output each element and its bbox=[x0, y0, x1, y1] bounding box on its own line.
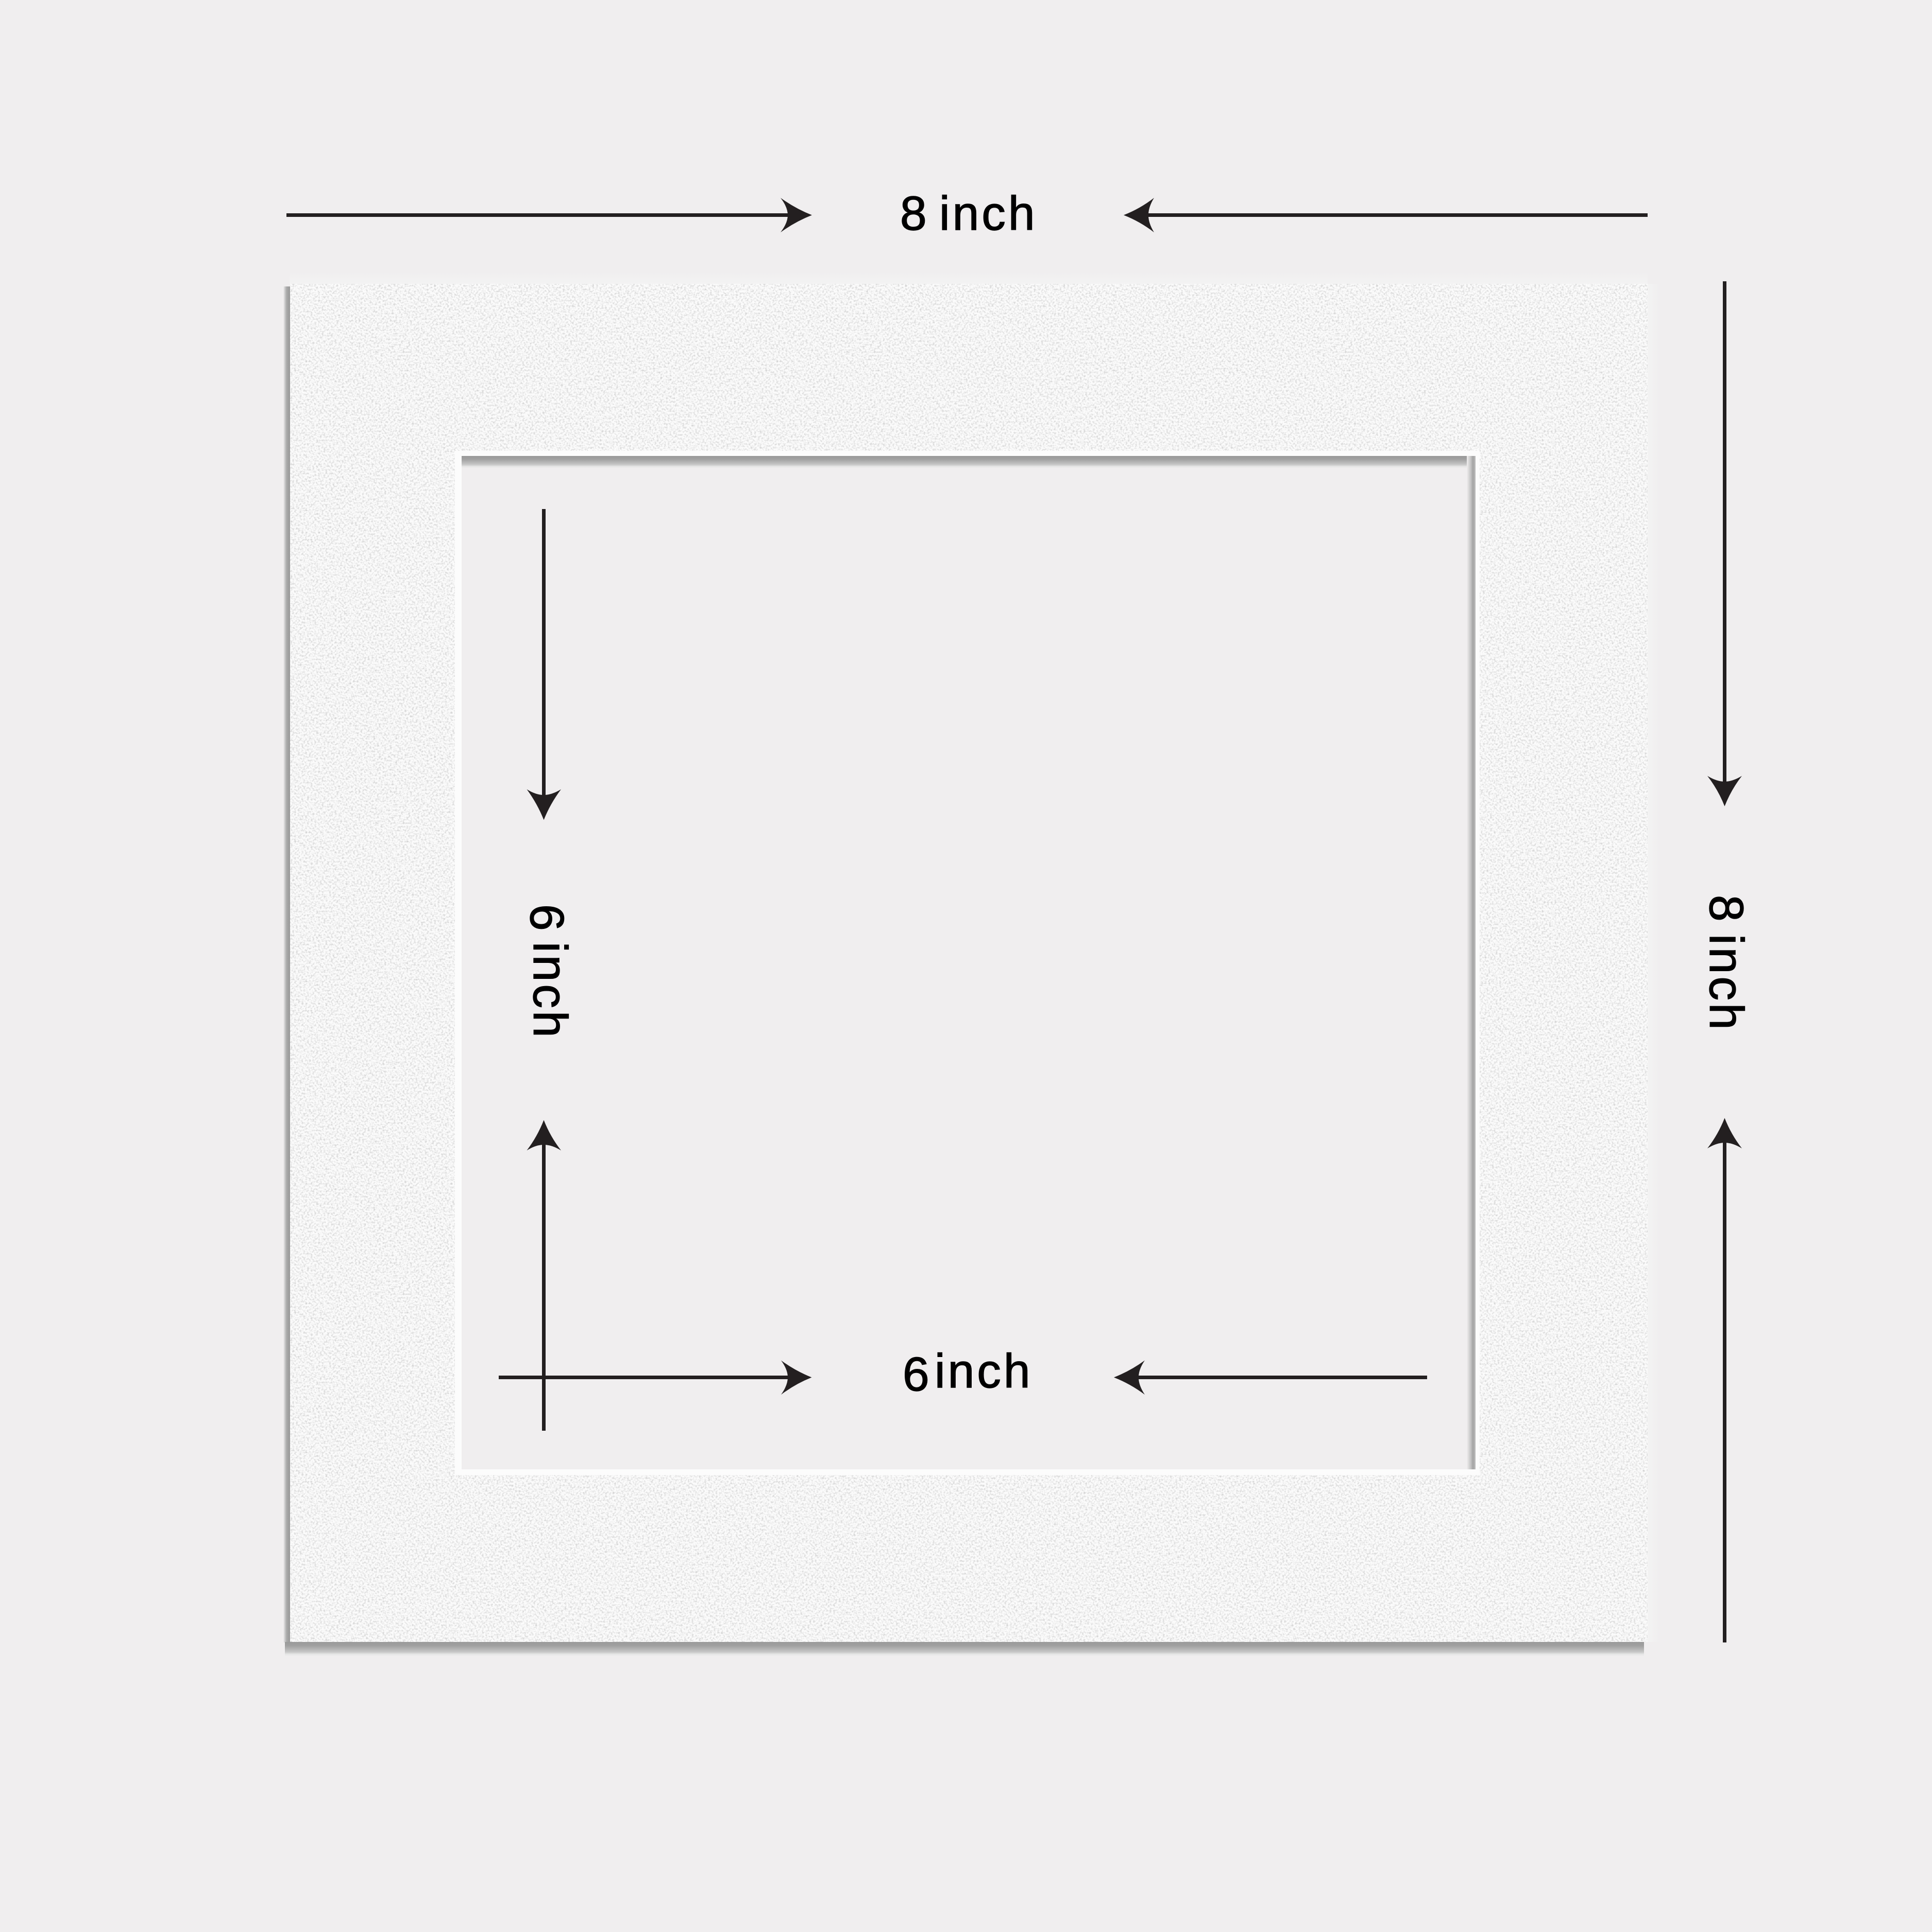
label: window height 6 inch bbox=[520, 904, 577, 1040]
label: window width 6 inch: 6 bbox=[903, 1347, 929, 1401]
arrow: window height, pointing up bbox=[527, 1120, 561, 1431]
arrow: window width, pointing left bbox=[1114, 1360, 1427, 1395]
label: window height 6 inch: 6 bbox=[520, 904, 574, 931]
arrow: window height, pointing down bbox=[527, 509, 561, 820]
mat outer shadow bbox=[283, 272, 1660, 1656]
label: top width 8 inch: inch bbox=[939, 187, 1038, 240]
label: top width 8 inch: 8 bbox=[900, 187, 927, 240]
arrow: right height, pointing up bbox=[1707, 1118, 1742, 1642]
window inner shadow bbox=[462, 456, 1476, 1469]
label: right height 8 inch: 8 bbox=[1700, 895, 1753, 922]
arrow: window width, pointing right bbox=[499, 1360, 812, 1395]
arrow: right height, pointing down bbox=[1707, 281, 1742, 806]
mat board bbox=[290, 284, 1648, 1642]
arrow: top width, pointing left bbox=[1124, 198, 1648, 232]
window bevel bbox=[455, 451, 1480, 1475]
panel: white photo mat with window cutout bbox=[283, 272, 1660, 1656]
label: window height 6 inch: inch bbox=[523, 942, 577, 1040]
label: right height 8 inch: inch bbox=[1700, 934, 1753, 1032]
arrow: top width, pointing right bbox=[286, 198, 812, 232]
window opening bbox=[462, 456, 1476, 1469]
label: window width 6 inch: inch bbox=[935, 1344, 1033, 1398]
